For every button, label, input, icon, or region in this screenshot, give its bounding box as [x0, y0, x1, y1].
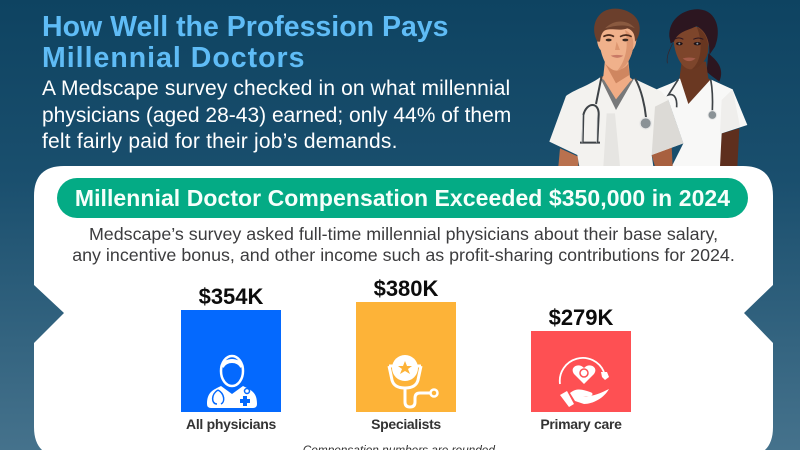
icon: stethoscope	[388, 355, 439, 408]
icon: heart in hand	[558, 357, 609, 407]
intro text: A Medscape survey checked in on what millennial	[42, 77, 510, 100]
intro text: physicians (aged 28-43) earned; only 44% of them	[42, 104, 511, 126]
bar: all physicians	[181, 310, 281, 412]
bar: primary care	[531, 331, 631, 412]
title: Millennial Doctors	[42, 42, 305, 74]
label: primary care: Primary care	[540, 416, 622, 432]
label: all physicians: All physicians	[186, 416, 276, 432]
intro text	[42, 77, 511, 153]
value: primary care: $279K	[549, 305, 613, 330]
title: How Well the Profession Pays	[42, 11, 449, 43]
icon: doctor	[207, 354, 257, 408]
female doctor	[657, 9, 747, 167]
heading pill: Millennial Doctor Compensation Exceeded $350,000 in 2024	[75, 185, 730, 211]
description text: Medscape’s survey asked full-time millennial physicians about their base salary,	[89, 224, 718, 244]
intro text: felt fairly paid for their job’s demands.	[42, 130, 398, 153]
value: specialists: $380K	[374, 276, 438, 301]
description text	[72, 224, 735, 265]
description text: any incentive bonus, and other income such as profit-sharing contributions for 2024.	[72, 245, 735, 265]
title	[42, 11, 449, 74]
bar chart	[181, 276, 631, 432]
illustration: two doctors	[549, 8, 748, 166]
heading pill	[57, 178, 748, 218]
value: all physicians: $354K	[199, 284, 263, 309]
label: specialists: Specialists	[371, 416, 441, 432]
bar: specialists	[356, 302, 456, 412]
male doctor	[549, 9, 683, 167]
